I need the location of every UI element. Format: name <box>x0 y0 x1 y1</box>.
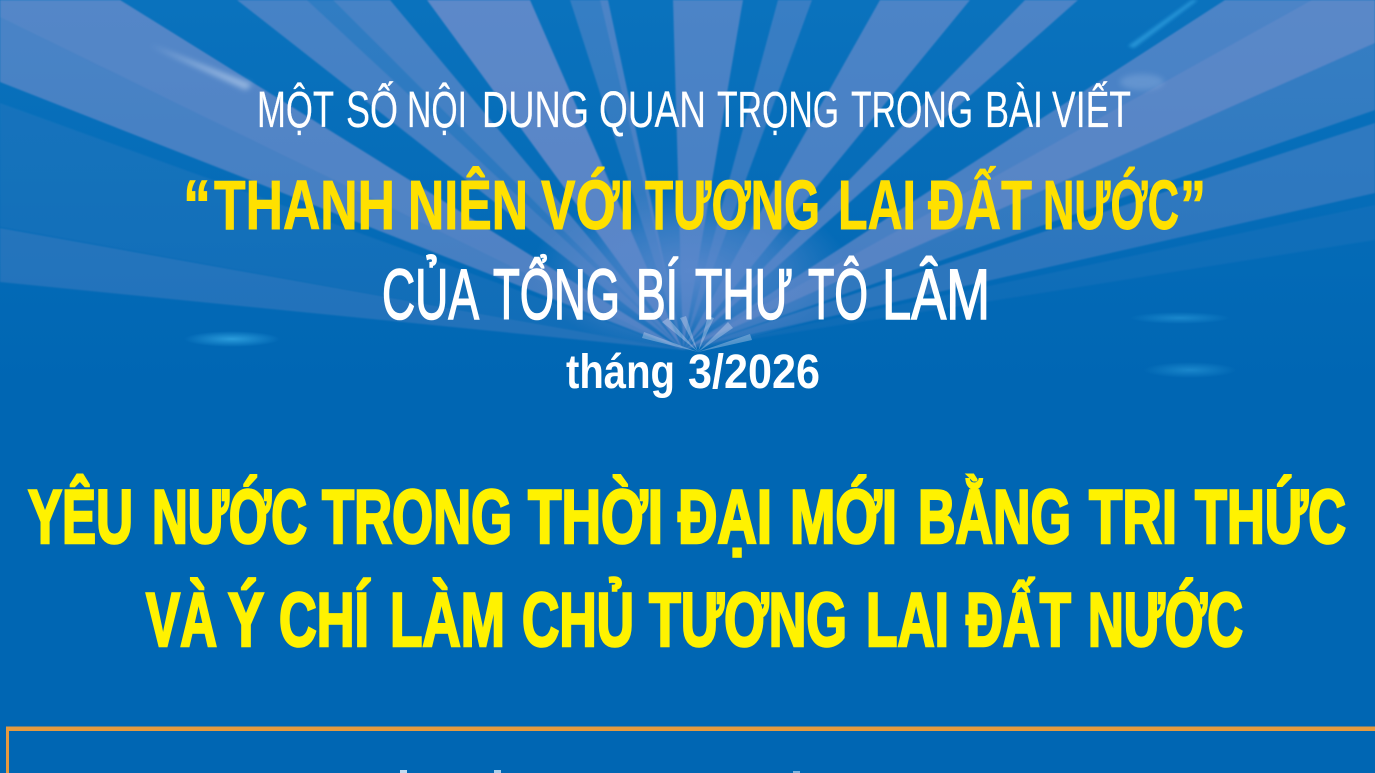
main title: CHÍ <box>279 578 370 663</box>
clipped text accents at bottom edge <box>400 770 800 773</box>
main title <box>28 474 1346 663</box>
main title: VÀ <box>146 578 217 663</box>
heading: intro line: DUNG <box>482 81 589 138</box>
heading: intro line <box>257 80 1131 138</box>
heading: date: tháng <box>566 346 675 399</box>
heading: author: TÔ <box>808 256 868 335</box>
heading: article title: ĐẤT <box>928 166 1032 244</box>
heading: article title: NƯỚC <box>1043 166 1179 244</box>
main title: YÊU <box>28 474 133 560</box>
heading: article title <box>183 165 1206 244</box>
heading: intro line: TRONG <box>851 81 973 138</box>
main title: MỚI <box>790 475 897 560</box>
main title: TƯƠNG <box>649 578 847 663</box>
heading: intro line: BÀI <box>985 81 1043 138</box>
glow highlights <box>150 0 1236 378</box>
main title: CHỦ <box>522 578 634 663</box>
heading: article title: “ <box>183 166 211 244</box>
heading: author: TỔNG <box>493 255 620 335</box>
content panel border <box>6 726 1375 773</box>
main title: TRONG <box>322 475 512 560</box>
heading: author: BÍ <box>636 256 678 335</box>
heading: article title: NIÊN <box>408 165 528 244</box>
heading: date: 3/2026 <box>688 346 820 399</box>
heading: intro line: NỘI <box>407 81 467 138</box>
center starburst <box>642 316 752 352</box>
main title: BẰNG <box>918 475 1071 560</box>
main title: Ý <box>228 578 264 663</box>
heading: date <box>566 346 820 399</box>
main title: ĐẤT <box>966 578 1071 663</box>
heading: author: CỦA <box>382 255 479 335</box>
heading: intro line: VIẾT <box>1052 80 1131 138</box>
heading: article title: VỚI <box>541 166 634 244</box>
main title: NƯỚC <box>152 475 307 560</box>
heading: article title: LAI <box>838 166 916 244</box>
main title: LÀM <box>390 578 505 663</box>
heading: author: LÂM <box>882 256 990 335</box>
main title: LAI <box>866 578 949 663</box>
heading: article title: THANH <box>214 166 395 244</box>
heading: intro line: MỘT <box>257 81 334 138</box>
main title: TRI <box>1089 475 1177 560</box>
heading: article title: TƯƠNG <box>645 166 820 244</box>
heading: intro line: QUAN <box>599 81 706 138</box>
light rays <box>0 0 1375 350</box>
heading: author <box>382 255 990 335</box>
heading: author: THƯ <box>695 256 793 335</box>
main title: ĐẠI <box>678 475 772 560</box>
heading: intro line: TRỌNG <box>717 81 839 138</box>
center light core <box>530 190 850 352</box>
main title: THỜI <box>528 475 663 560</box>
heading: intro line: SỐ <box>346 80 398 138</box>
main title: NƯỚC <box>1088 578 1243 663</box>
heading: article title: ” <box>1180 166 1206 244</box>
